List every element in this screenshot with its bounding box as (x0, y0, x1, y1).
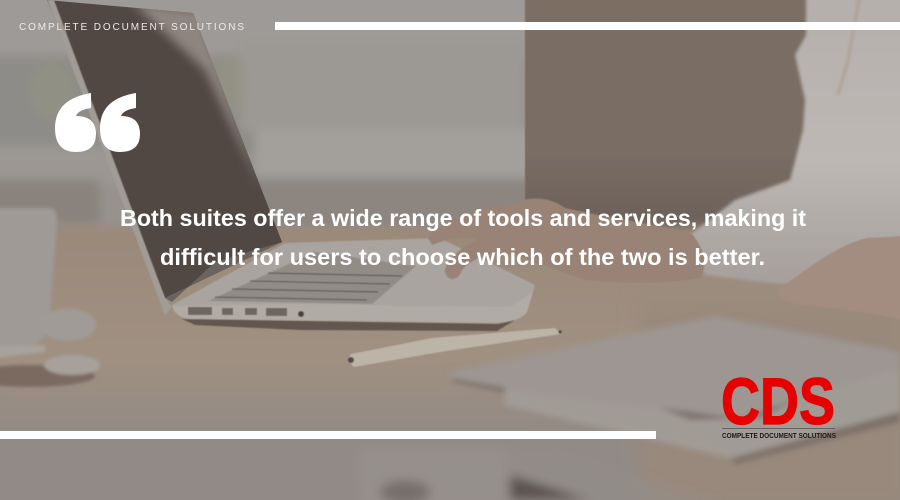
plant (30, 55, 246, 118)
wall and window (0, 0, 540, 228)
top white rule (275, 22, 900, 30)
shirt and sleeve (690, 0, 900, 320)
right hand (777, 236, 900, 320)
logo: CDS: CDS (721, 364, 835, 438)
quote text (120, 205, 806, 270)
brand label: COMPLETE DOCUMENT SOLUTIONS (19, 22, 244, 33)
typing hand (428, 199, 704, 283)
quote text: Both suites offer a wide range of tools and services, making it (120, 205, 806, 231)
laptop screen (47, 0, 282, 315)
quote text: difficult for users to choose which of the two is better. (160, 244, 765, 270)
laptop base (172, 238, 535, 331)
notebook (450, 316, 900, 464)
desk (0, 226, 900, 500)
logo: CDS: COMPLETE DOCUMENT SOLUTIONS (722, 431, 836, 440)
bottom white rule (0, 431, 656, 439)
icon: quotation mark (55, 93, 140, 152)
pen (348, 328, 562, 367)
coffee cup (0, 208, 100, 387)
foreground blur (360, 450, 720, 500)
